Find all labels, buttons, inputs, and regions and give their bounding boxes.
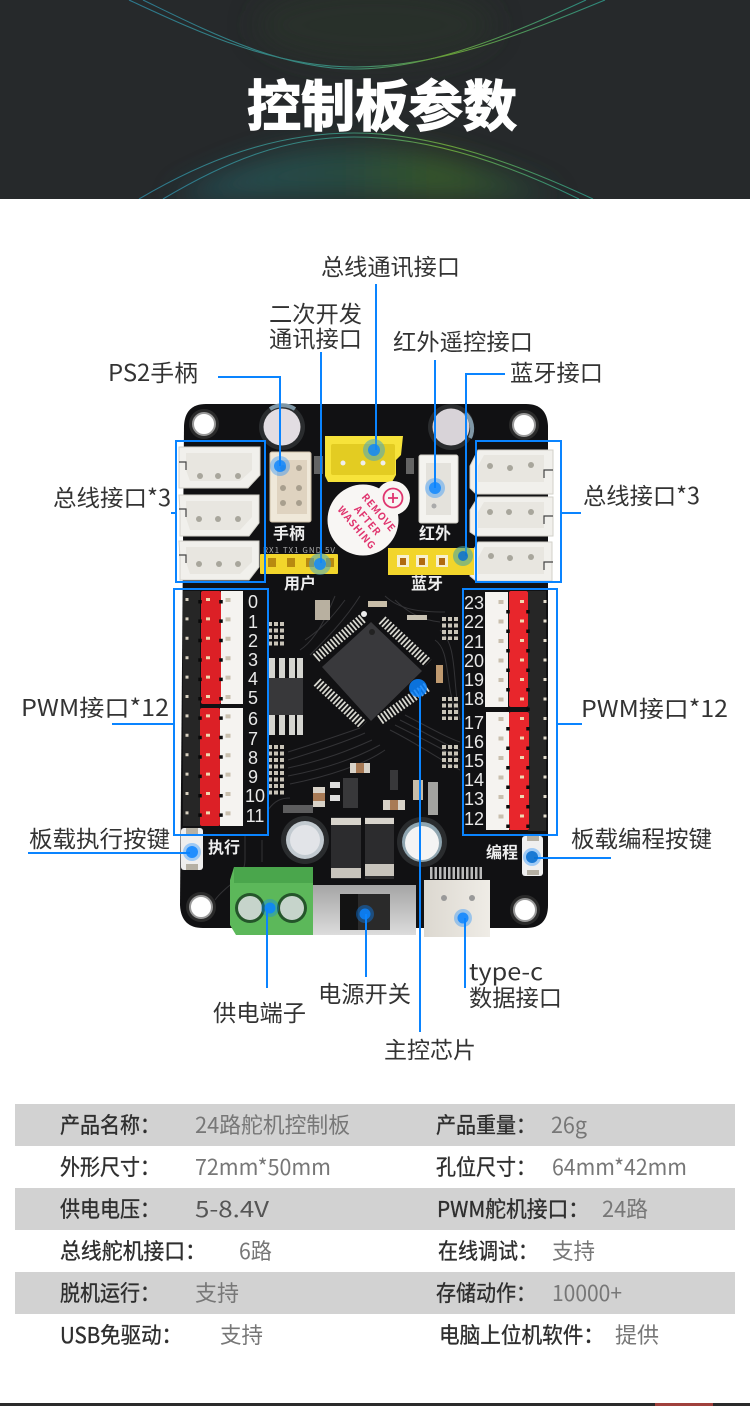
left PWM numbers: 3 <box>248 650 258 670</box>
silk labels: 红外 <box>419 520 451 544</box>
callout labels: 电源开关 <box>318 975 411 1009</box>
callout: main chip pointer <box>409 679 427 1032</box>
resistor arrays <box>270 617 456 795</box>
row: bus servo and debug: 6路 <box>239 1234 272 1266</box>
silk labels: 执行 <box>208 834 240 858</box>
yellow bus connector <box>314 436 414 482</box>
callout: program button pointer <box>523 848 611 866</box>
left bus connectors <box>179 447 260 580</box>
callout: PWM left box <box>112 589 268 835</box>
mounting holes <box>186 409 540 925</box>
callout labels: 总线接口*3 <box>583 477 700 511</box>
right PWM numbers: 14 <box>464 770 484 790</box>
right PWM numbers: 16 <box>464 732 484 752</box>
buzzer text: AFTER <box>351 501 386 539</box>
left PWM numbers: 0 <box>248 592 258 612</box>
callout: switch pointer <box>356 905 374 977</box>
row: USB and software: USB免驱动： <box>60 1318 182 1350</box>
callout: bus connector left box <box>171 441 265 582</box>
right PWM numbers: 23 <box>464 593 484 613</box>
left PWM numbers: 11 <box>246 806 264 826</box>
right PWM numbers: 20 <box>464 651 484 671</box>
left PWM numbers: 8 <box>248 748 258 768</box>
right PWM numbers: 19 <box>464 670 484 690</box>
left PWM numbers: 1 <box>248 612 258 632</box>
callout labels: 二次开发 <box>269 295 362 329</box>
left PWM numbers: 2 <box>248 631 258 651</box>
buzzer text <box>335 490 400 552</box>
small SMD parts <box>283 600 443 815</box>
callout: type-c pointer <box>454 909 472 988</box>
callout: power terminal pointer <box>261 899 279 988</box>
silk labels: 编程 <box>486 839 518 863</box>
left PWM numbers: 5 <box>248 688 258 708</box>
left PWM numbers: 9 <box>248 767 258 787</box>
callout labels: 通讯接口 <box>269 320 362 354</box>
left PWM numbers: 7 <box>248 729 258 749</box>
callout labels: 总线通讯接口 <box>321 248 460 282</box>
title: 控制板参数 <box>247 62 517 142</box>
callout: bluetooth pointer <box>453 374 505 566</box>
row: offline and storage <box>60 1276 622 1308</box>
row: voltage and PWM <box>60 1192 648 1224</box>
buzzer <box>328 481 410 556</box>
yellow user header: RX1 TX1 GND 5V <box>263 545 335 556</box>
row: dimensions <box>60 1150 687 1182</box>
header lower curves <box>139 133 593 199</box>
row: offline and storage: 脱机运行： <box>60 1276 160 1308</box>
callout: execute button pointer <box>28 843 201 861</box>
power switch <box>313 885 416 935</box>
infrared connector <box>419 455 458 523</box>
row: voltage and PWM: 24路 <box>602 1192 648 1224</box>
callout: PS2 pointer <box>218 377 290 476</box>
row: name and weight: 24路舵机控制板 <box>195 1108 350 1140</box>
row: dimensions: 外形尺寸： <box>60 1150 160 1182</box>
row: bus servo and debug: 在线调试： <box>438 1234 538 1266</box>
callout labels: 供电端子 <box>213 994 306 1028</box>
USB-C port <box>424 873 490 937</box>
row: USB and software: 提供 <box>615 1318 659 1350</box>
main chip <box>316 611 428 725</box>
right PWM numbers: 18 <box>464 689 484 709</box>
buzzer text: WASHING <box>335 502 380 552</box>
silk labels: 手柄 <box>273 520 305 544</box>
pcb traces <box>215 596 460 900</box>
row: offline and storage: 10000+ <box>552 1276 622 1308</box>
row: USB and software <box>60 1318 659 1350</box>
row: name and weight: 产品重量： <box>436 1108 536 1140</box>
callout labels: 板载执行按键 <box>29 820 170 854</box>
callout: PWM right box <box>463 589 582 835</box>
callout labels <box>21 248 728 1065</box>
callout labels: 数据接口 <box>469 979 562 1013</box>
row: bus servo and debug <box>60 1234 595 1266</box>
callout labels: PWM接口*12 <box>21 689 169 723</box>
right PWM numbers: 22 <box>464 612 484 632</box>
top capacitors <box>259 404 474 450</box>
callout labels: 主控芯片 <box>384 1031 476 1065</box>
bottom edge bar <box>0 1403 750 1406</box>
callout labels: 总线接口*3 <box>53 479 171 513</box>
callout labels: 蓝牙接口 <box>510 354 603 388</box>
PS2 connector <box>270 452 311 522</box>
spec table <box>15 1104 735 1350</box>
right PWM numbers: 13 <box>464 789 484 809</box>
program button <box>522 836 543 876</box>
header glow <box>184 136 538 199</box>
right PWM numbers <box>464 593 484 829</box>
SOIC chip <box>267 658 303 735</box>
callout: bus comm pointer <box>363 284 385 461</box>
row: USB and software: 电脑上位机软件： <box>439 1318 604 1350</box>
lower capacitors <box>281 816 447 867</box>
yellow bluetooth header <box>388 548 474 575</box>
callout labels: PS2手柄 <box>108 354 198 388</box>
pcb <box>180 404 548 928</box>
right PWM numbers: 21 <box>464 632 484 652</box>
row: USB and software: 支持 <box>220 1318 263 1350</box>
callout labels: 板载编程按键 <box>571 820 712 854</box>
row: voltage and PWM: 供电电压： <box>60 1192 160 1224</box>
row: bus servo and debug: 支持 <box>552 1234 595 1266</box>
left PWM numbers: 6 <box>248 709 258 729</box>
callout labels: 红外遥控接口 <box>393 323 533 357</box>
callout: infrared pointer <box>425 360 445 498</box>
left PWM numbers: 10 <box>245 786 265 806</box>
left PWM numbers: 4 <box>248 669 258 689</box>
silk labels: 用户 <box>284 570 316 594</box>
callout labels: PWM接口*12 <box>581 690 728 724</box>
row: name and weight <box>60 1108 588 1140</box>
yellow user header <box>260 545 338 574</box>
row: offline and storage: 存储动作： <box>436 1276 536 1308</box>
control board photo <box>179 404 553 937</box>
row: dimensions: 64mm*42mm <box>552 1150 687 1182</box>
table stripes <box>15 1104 735 1314</box>
callout: secondary dev pointer <box>309 352 331 575</box>
right PWM numbers: 12 <box>464 809 484 829</box>
row: name and weight: 26g <box>551 1108 588 1140</box>
header banner <box>0 0 750 199</box>
callout labels: type-c <box>469 953 543 987</box>
header upper curves <box>129 0 605 69</box>
right PWM numbers: 15 <box>464 751 484 771</box>
silk labels <box>208 520 518 863</box>
row: name and weight: 产品名称： <box>60 1108 160 1140</box>
power terminal <box>230 867 313 935</box>
row: dimensions: 72mm*50mm <box>195 1150 331 1182</box>
left PWM headers <box>183 591 243 826</box>
left PWM numbers <box>245 592 265 826</box>
execute button <box>181 828 203 870</box>
silk labels: 蓝牙 <box>411 570 443 594</box>
row: offline and storage: 支持 <box>195 1276 239 1308</box>
row: voltage and PWM: PWM舵机接口： <box>437 1192 589 1224</box>
row: dimensions: 孔位尺寸： <box>436 1150 536 1182</box>
buzzer text: REMOVE <box>359 490 400 535</box>
row: bus servo and debug: 总线舵机接口： <box>60 1234 206 1266</box>
right PWM headers <box>485 591 546 831</box>
right PWM numbers: 17 <box>464 713 484 733</box>
right bus connectors <box>470 450 553 581</box>
callout: bus connector right box <box>476 441 581 582</box>
MOSFETs <box>331 817 394 879</box>
row: voltage and PWM: 5-8.4V <box>195 1192 269 1224</box>
